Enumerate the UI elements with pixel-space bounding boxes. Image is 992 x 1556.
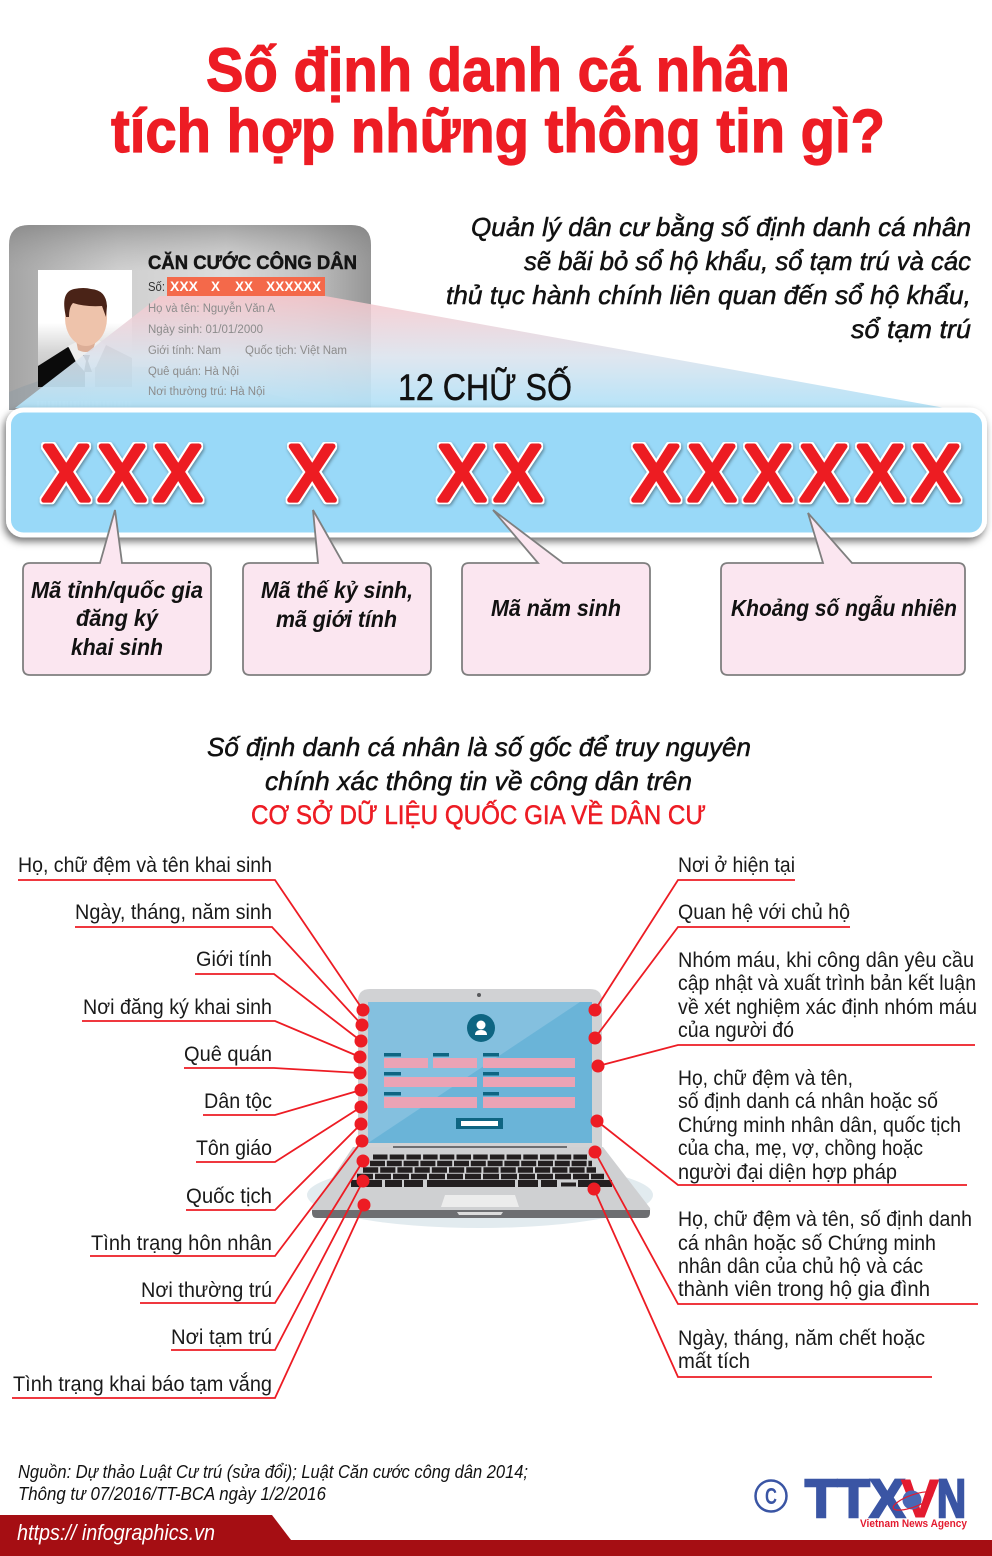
touchpad: [441, 1195, 519, 1207]
footer bar: https:// infographics.vn: [17, 1520, 215, 1545]
left data labels: Nơi tạm trú: [171, 1326, 272, 1349]
footer bar: [0, 1515, 992, 1556]
callout: birth year code: Mã năm sinh: [491, 595, 621, 621]
callout: century and gender code: mã giới tính: [276, 606, 397, 632]
right data labels: cá nhân hoặc số Chứng minh: [678, 1232, 936, 1255]
card heading: CĂN CƯỚC CÔNG DÂN: [148, 252, 357, 274]
laptop screen: [368, 1002, 592, 1143]
TTXVN logo: V: [901, 1469, 939, 1529]
callout: birth year code: [462, 510, 650, 675]
copyright icon: C: [765, 1483, 777, 1509]
right data labels: mất tích: [678, 1350, 750, 1373]
left data labels: Nơi thường trú: [141, 1279, 272, 1302]
form labels: [384, 1053, 499, 1096]
left connector dots: [354, 1004, 370, 1212]
source note: Thông tư 07/2016/TT-BCA ngày 1/2/2016: [18, 1484, 327, 1504]
right connector dots: [588, 1004, 604, 1196]
form fields: [384, 1058, 575, 1108]
number panel: [8, 410, 984, 535]
callout: century and gender code: [243, 510, 431, 675]
right data labels: Chứng minh nhân dân, quốc tịch: [678, 1114, 961, 1137]
card number: XXX: [170, 278, 199, 294]
right data labels: Nơi ở hiện tại: [678, 854, 795, 877]
card details: Nơi thường trú: Hà Nội: [148, 386, 265, 398]
card details: [148, 302, 347, 398]
left data labels: Tình trạng khai báo tạm vắng: [13, 1373, 272, 1396]
card details: Ngày sinh: 01/01/2000: [148, 324, 263, 336]
TTXVN logo: [805, 1469, 968, 1530]
left data labels: Nơi đăng ký khai sinh: [83, 996, 272, 1019]
card number: XXXXXX: [266, 278, 322, 294]
right data labels: [678, 854, 977, 1373]
callout: random digits: [721, 513, 965, 675]
TTXVN logo: Vietnam News Agency: [860, 1518, 968, 1530]
card details: Quê quán: Hà Nội: [148, 366, 239, 378]
right data labels: nhân dân của chủ hộ và các: [678, 1255, 923, 1278]
source note: [18, 1462, 528, 1504]
right data labels: của người đó: [678, 1019, 794, 1042]
left data labels: Quê quán: [184, 1043, 272, 1066]
intro paragraph: [446, 212, 971, 344]
callout: province code: Mã tỉnh/quốc gia: [31, 577, 203, 603]
source note: Nguồn: Dự thảo Luật Cư trú (sửa đổi); Luật Căn cước công dân 2014;: [18, 1462, 528, 1482]
card details: Họ và tên: Nguyễn Văn A: [148, 302, 275, 315]
translucent beam: [15, 296, 945, 408]
section heading: CƠ SỞ DỮ LIỆU QUỐC GIA VỀ DÂN CƯ: [251, 798, 706, 830]
right data labels: Họ, chữ đệm và tên,: [678, 1067, 853, 1090]
TTXVN logo: TTX: [805, 1469, 905, 1529]
section heading: [207, 732, 751, 830]
left data labels: Ngày, tháng, năm sinh: [75, 901, 272, 924]
section heading: Số định danh cá nhân là số gốc để truy nguyên: [207, 732, 751, 762]
callout: century and gender code: Mã thế kỷ sinh,: [261, 577, 413, 603]
right data labels: Ngày, tháng, năm chết hoặc: [678, 1327, 925, 1350]
callout: province code: khai sinh: [71, 634, 163, 660]
right connector lines: [594, 880, 978, 1377]
intro paragraph: sổ tạm trú: [851, 314, 971, 344]
title: tích hợp những thông tin gì?: [111, 97, 885, 165]
portrait photo: [38, 270, 132, 387]
copyright icon: [756, 1480, 786, 1512]
title: [111, 36, 885, 165]
section heading: chính xác thông tin về công dân trên: [265, 766, 692, 796]
right data labels: số định danh cá nhân hoặc số: [678, 1090, 938, 1113]
right data labels: Họ, chữ đệm và tên, số định danh: [678, 1208, 972, 1231]
card number: X: [211, 278, 221, 294]
ID card illustration: [9, 225, 945, 410]
intro paragraph: sẽ bãi bỏ sổ hộ khẩu, sổ tạm trú và các: [524, 246, 971, 276]
callout: province code: [23, 510, 211, 675]
intro paragraph: Quản lý dân cư bằng số định danh cá nhân: [471, 212, 971, 242]
digit placeholders: XXXXXXXXXXXX: [42, 429, 960, 517]
12 digits heading: 12 CHỮ SỐ: [398, 366, 572, 408]
right data labels: về xét nghiệm xác định nhóm máu: [678, 996, 977, 1019]
left data labels: Quốc tịch: [186, 1185, 272, 1208]
callout: province code: đăng ký: [76, 605, 159, 631]
right data labels: cập nhật và xuất trình bản kết luận: [678, 972, 976, 995]
barcode: [37, 401, 132, 408]
right data labels: của cha, mẹ, vợ, chồng hoặc: [678, 1137, 923, 1160]
callout: random digits: Khoảng số ngẫu nhiên: [731, 595, 957, 621]
left data labels: Họ, chữ đệm và tên khai sinh: [18, 854, 272, 877]
right data labels: thành viên trong hộ gia đình: [678, 1278, 930, 1301]
submit button: [456, 1118, 503, 1129]
keyboard: [351, 1157, 612, 1184]
card number: Số:: [148, 280, 165, 294]
left data labels: [13, 854, 272, 1396]
card details: Giới tính: Nam: [148, 345, 221, 357]
card number: [148, 277, 325, 296]
intro paragraph: thủ tục hành chính liên quan đến sổ hộ khẩu,: [446, 280, 971, 310]
right data labels: Nhóm máu, khi công dân yêu cầu: [678, 949, 974, 972]
left data labels: Tình trạng hôn nhân: [91, 1232, 272, 1255]
TTXVN logo: N: [937, 1469, 966, 1529]
card details: Quốc tịch: Việt Nam: [245, 345, 347, 357]
card number: XX: [235, 278, 254, 294]
right data labels: Quan hệ với chủ hộ: [678, 901, 850, 924]
left data labels: Giới tính: [196, 948, 272, 971]
left data labels: Dân tộc: [204, 1090, 272, 1113]
left data labels: Tôn giáo: [196, 1137, 272, 1160]
user avatar: [467, 1014, 495, 1042]
left connector lines: [12, 880, 364, 1398]
right data labels: người đại diện hợp pháp: [678, 1161, 897, 1184]
laptop illustration: [307, 989, 653, 1228]
title: Số định danh cá nhân: [206, 36, 790, 104]
